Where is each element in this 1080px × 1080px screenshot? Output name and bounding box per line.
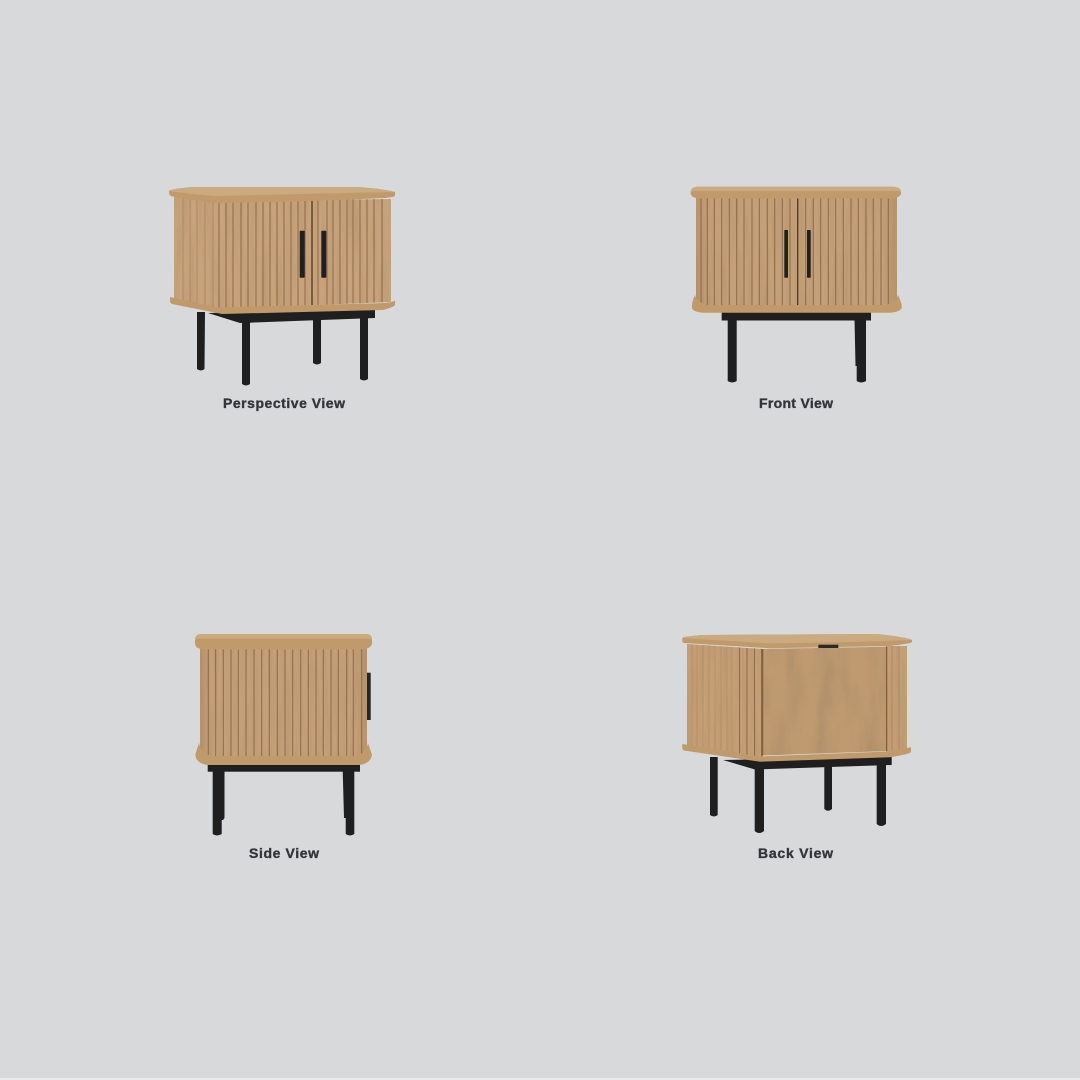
panel: front view bbox=[691, 187, 902, 411]
label: side view: Side View bbox=[249, 845, 319, 861]
icon: perspective cabinet body bbox=[174, 196, 391, 308]
icon: perspective cabinet legs and frame bbox=[197, 310, 375, 386]
icon: back cabinet top bbox=[682, 634, 912, 648]
icon: front cabinet legs and frame bbox=[722, 312, 871, 382]
icon: back cabinet slatted body bbox=[687, 640, 907, 760]
label: back view: Back View bbox=[758, 845, 833, 861]
icon: front cabinet top bbox=[691, 187, 901, 198]
icon: side cabinet base bbox=[195, 743, 372, 765]
icon: back cabinet flat panel bbox=[763, 647, 887, 756]
label: perspective view: Perspective View bbox=[223, 395, 345, 411]
panel: back view bbox=[682, 634, 912, 861]
icon: side cabinet legs and frame bbox=[208, 765, 360, 836]
icon: front cabinet base bbox=[692, 295, 902, 313]
icon: perspective cabinet base bbox=[170, 297, 395, 314]
panel: side view bbox=[195, 634, 372, 861]
icon: side view handle edge bbox=[367, 673, 371, 720]
icon: front cabinet body bbox=[696, 197, 897, 305]
icon: front door handles bbox=[784, 230, 811, 278]
icon: back cabinet legs and frame bbox=[710, 757, 892, 833]
icon: back cabinet handle bbox=[818, 645, 838, 648]
icon: side cabinet top bbox=[195, 634, 372, 649]
icon: side cabinet body bbox=[200, 648, 367, 756]
label: front view: Front View bbox=[759, 395, 833, 411]
icon: perspective door handles bbox=[300, 231, 326, 278]
icon: back cabinet base bbox=[682, 744, 911, 762]
icon: perspective cabinet top bbox=[169, 187, 395, 203]
panel: perspective view bbox=[169, 187, 395, 411]
